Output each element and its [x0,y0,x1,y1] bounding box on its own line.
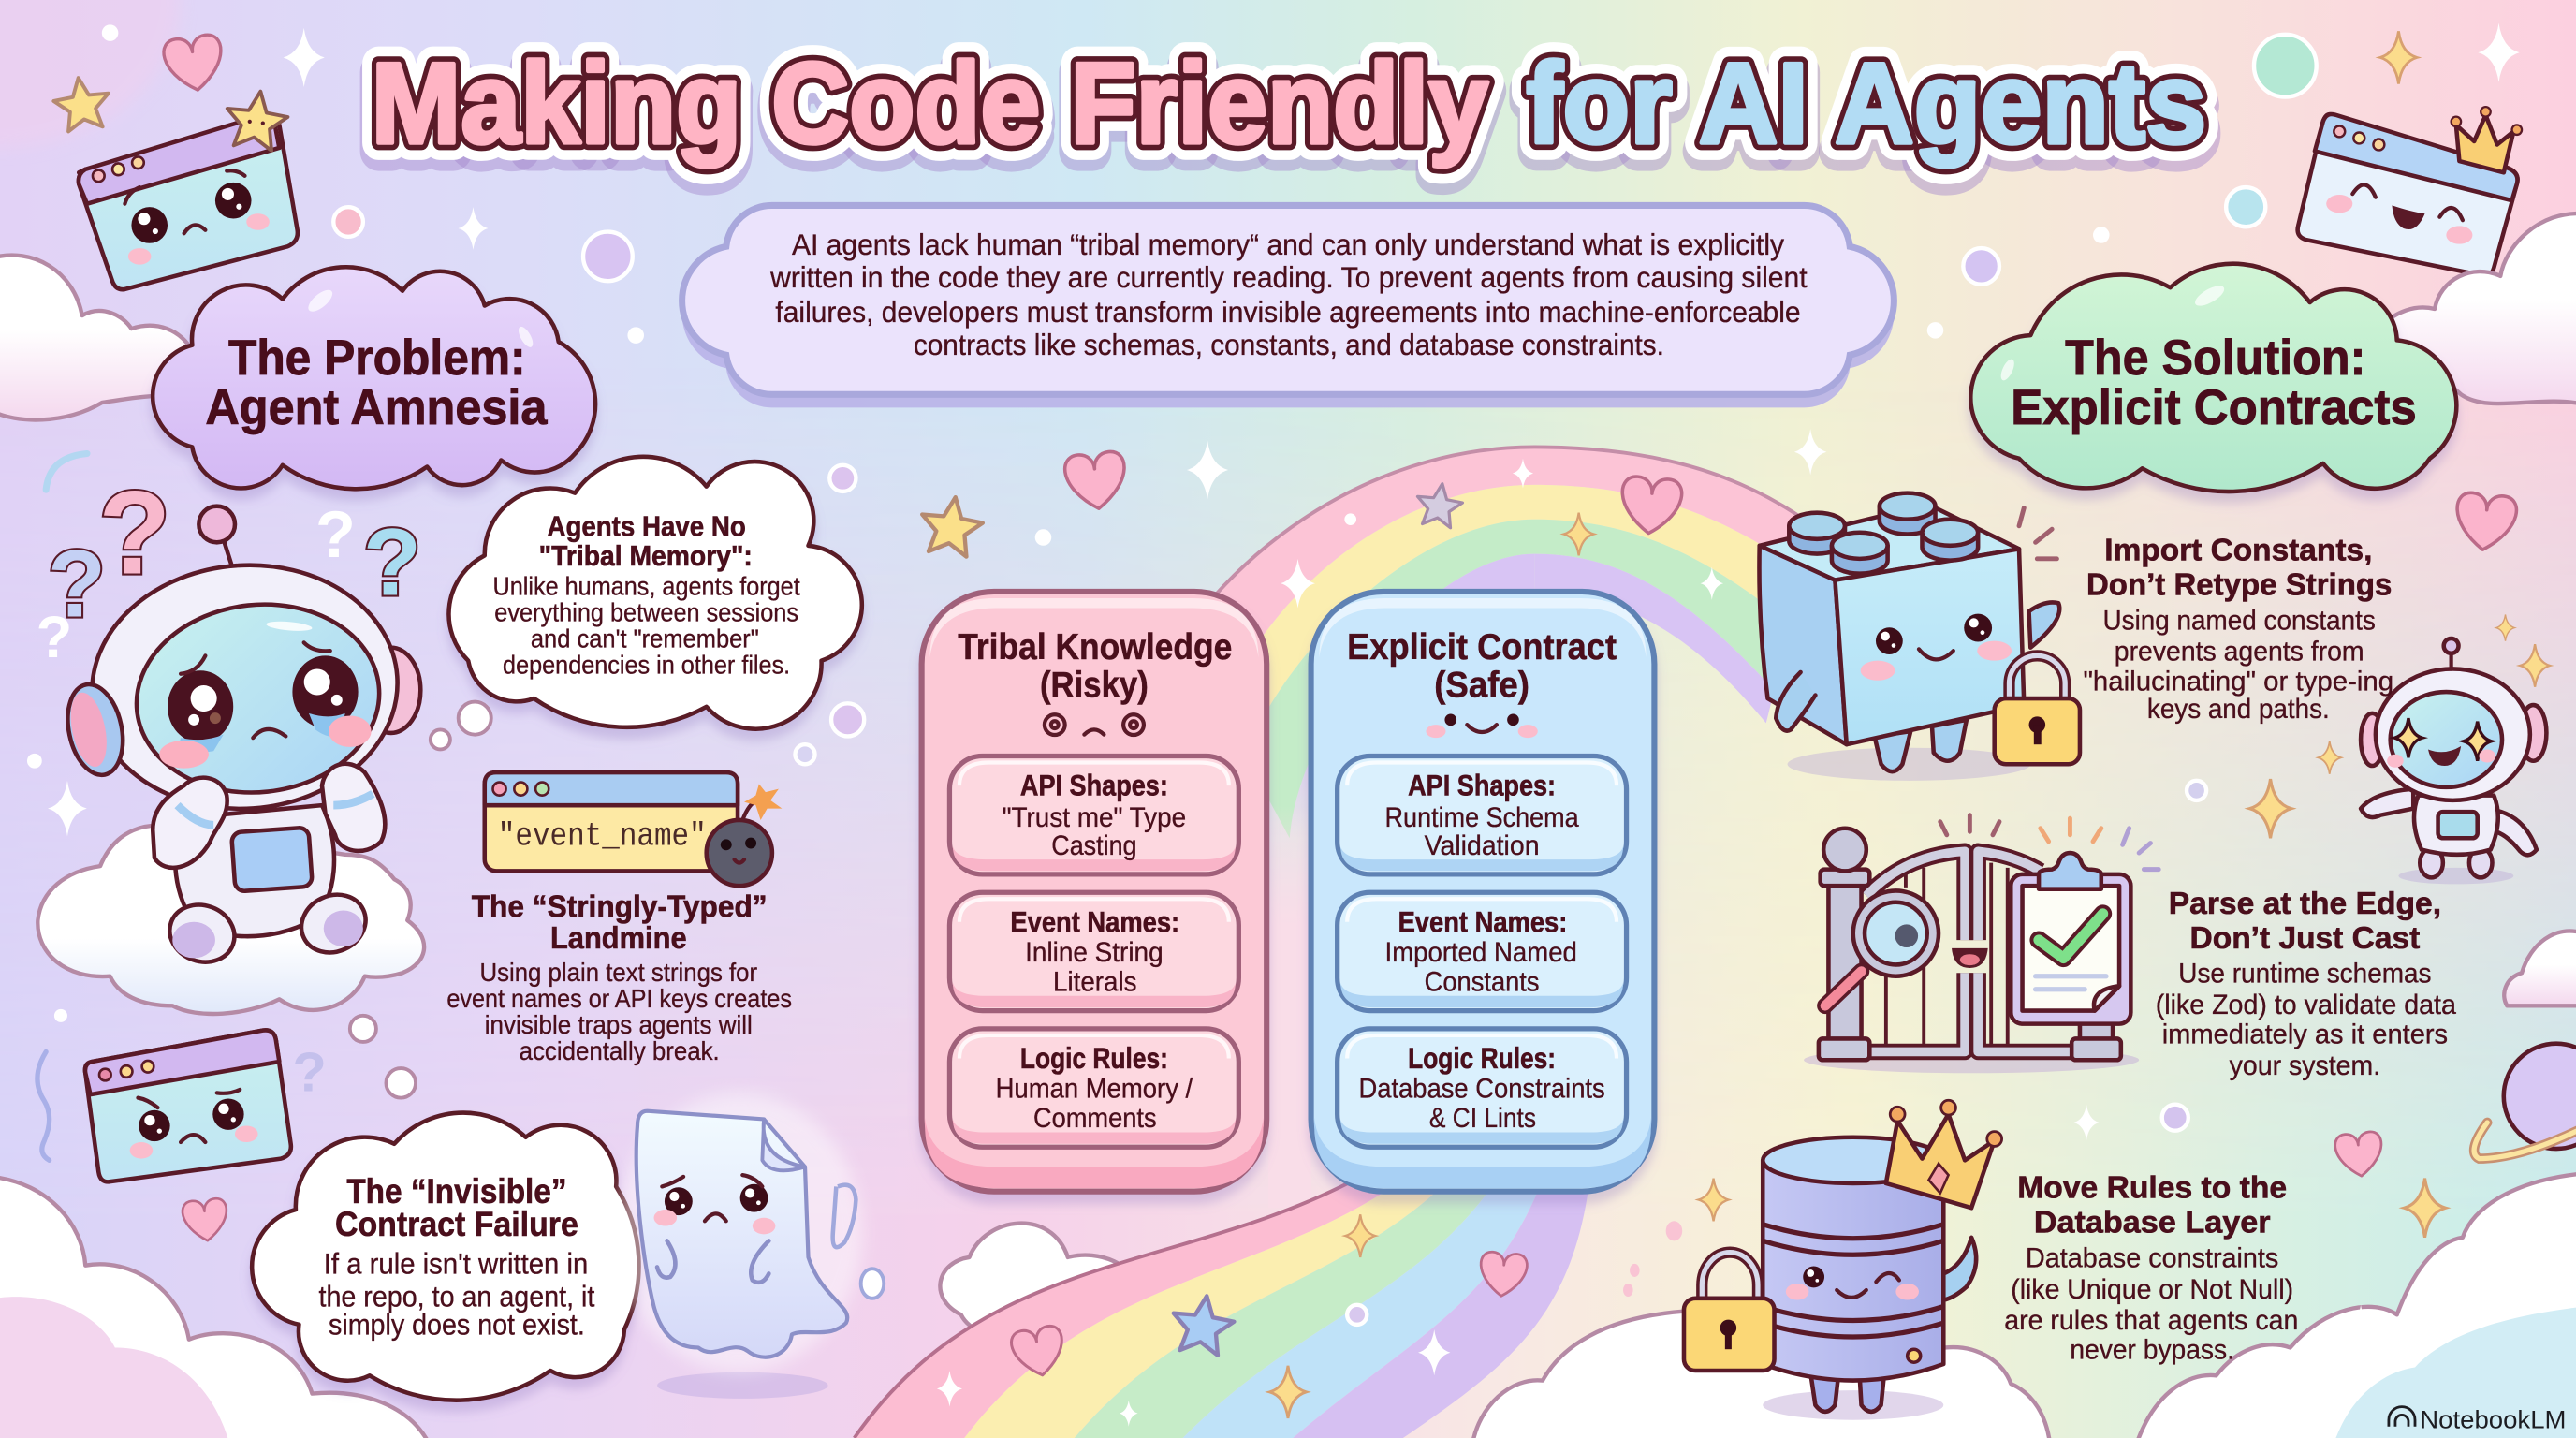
box: api shapes: API Shapes: [1020,769,1168,802]
front face [1835,549,2024,744]
box: event names [1338,892,1627,1011]
arms [2029,602,2059,648]
box: event names: Literals [1053,967,1137,998]
text: stringly-typed landmine: event names or API keys creates [446,984,792,1013]
rays [1940,815,1999,835]
box: event names: Constants [1425,967,1540,998]
box: logic rules: Human Memory / [996,1074,1193,1105]
astronaut: happy small [2361,638,2546,884]
callout: invisible contract failure: the repo, to an agent, it [318,1280,595,1313]
top face [1760,507,2019,580]
text: import constants: prevents agents from [2115,637,2364,668]
panel: explicit contract (safe): (Safe) [1434,665,1530,705]
bars [1886,863,2008,1049]
lock [1995,655,2080,764]
heading: the solution: The Solution: [2065,330,2365,386]
callout: invisible contract failure: The “Invisible” [346,1172,567,1211]
text: move rules: never bypass. [2070,1335,2234,1366]
text: move rules: Database Layer [2034,1206,2271,1240]
small rainbow [46,453,87,490]
ghost document [616,1093,884,1399]
title: for AI Agents [1526,40,2206,169]
question marks: ? [37,605,72,670]
gap between panels [1268,805,1311,1208]
thought cloud: agents have no tribal memory: everything between sessions [494,598,798,627]
text: move rules: (like Unique or Not Null) [2011,1274,2293,1305]
icon: bomb [707,784,782,886]
text: import constants: keys and paths. [2147,694,2330,725]
code window: event name [485,772,738,871]
text: move rules [2004,1171,2298,1366]
title: for AI Agents [1526,48,2206,177]
callout: invisible contract failure: simply does not exist. [329,1307,585,1341]
callout: invisible contract failure: Contract Failure [335,1205,578,1243]
box: event names: Inline String [1025,937,1164,968]
headphone right [361,648,420,733]
text: stringly-typed landmine: Using plain text strings for [479,958,757,987]
brand: notebooklm: NotebookLM [2420,1404,2566,1433]
cloud: top right [2382,213,2576,404]
icon: lego block [1759,493,2080,781]
icon: database with crown and lock [1684,1100,2002,1420]
panel: explicit contract (safe) [1311,592,1654,1192]
face: dizzy swirl [1045,714,1144,735]
helmet [84,555,405,819]
studs [1789,493,1978,574]
rainbow ribbon [855,1175,1590,1438]
intro panel: written in the code they are currently reading. To prevent agents from causing silent [769,260,1808,294]
box: logic rules: Logic Rules: [1408,1041,1556,1075]
thought cloud: agents have no tribal memory: Agents Have No [547,509,746,542]
body [175,805,334,936]
cloud: bottom left [0,1177,431,1438]
box: event names: Event Names: [1010,904,1179,938]
icon: gate with magnifier and clipboard [1804,815,2159,1073]
base right [2080,1019,2113,1040]
bubbles [333,35,2317,1325]
tears, blush, mouth, brows [159,642,372,769]
text: move rules: Database constraints [2026,1242,2278,1273]
text: parse at the edge [2156,887,2456,1081]
title: for AI Agents [1526,40,2206,169]
panel: tribal knowledge (risky): Tribal Knowledge [958,627,1232,668]
rainbow arch [1150,447,1823,838]
thought bubbles [350,702,491,1098]
panel: tribal knowledge (risky): (Risky) [1040,665,1149,705]
question marks: ? [315,497,356,571]
text: import constants: Using named constants [2103,605,2376,636]
text: parse at the edge: your system. [2230,1050,2380,1081]
heading: the problem [153,267,595,489]
gate leaves [1866,851,2073,1051]
title: Making Code Friendly [372,40,1488,169]
text: import constants: "hailucinating" or type-ing [2083,666,2393,697]
face: happy [1426,714,1538,738]
panel: explicit contract (safe): Explicit Contract [1347,627,1617,668]
box: logic rules: Comments [1033,1103,1157,1134]
intro panel: contracts like schemas, constants, and database constraints. [914,328,1664,361]
text: import constants: Don’t Retype Strings [2086,567,2392,602]
title: for AI Agents [1526,40,2206,169]
heading: the problem: Agent Amnesia [205,380,548,435]
sparkles: gold [1269,31,2550,1418]
cloud: small near rainbow [940,1224,1142,1340]
text: stringly-typed landmine: invisible traps agents will [485,1010,753,1039]
heading: the problem: The Problem: [228,330,526,386]
window: frustrated [37,1030,327,1181]
thought cloud: agents have no tribal memory: Unlike humans, agents forget [493,571,800,600]
thought cloud: agents have no tribal memory [448,457,862,729]
heading: the solution [1970,264,2456,492]
heading: the solution: Explicit Contracts [2011,380,2417,435]
arms [153,764,385,868]
eyes [168,655,359,742]
callout: invisible contract failure: If a rule isn't written in [324,1246,588,1280]
stars [51,74,1465,1357]
box: logic rules [949,1029,1238,1147]
cloud: bottom right [1472,1173,2576,1438]
text: import constants: Import Constants, [2104,534,2372,568]
intro panel: AI agents lack human “tribal memory“ and can only understand what is explicitly [792,227,1784,261]
headphone left [60,679,130,780]
text: import constants [2083,534,2393,725]
feet [1875,720,1967,771]
window: frustrated: ? [292,1041,327,1104]
box: logic rules: & CI Lints [1429,1103,1536,1134]
cloud under astronaut [37,826,424,1014]
gate mouth [1952,948,1988,968]
title [372,40,2206,177]
window: sad with star [79,87,298,289]
box: api shapes: "Trust me" Type [1003,802,1186,833]
code window: event name: "event_name" [498,817,707,855]
question marks: ? [363,508,421,615]
text: parse at the edge: immediately as it enters [2162,1020,2448,1050]
text: move rules: are rules that agents can [2004,1305,2298,1336]
thought cloud: agents have no tribal memory: dependencies in other files. [503,651,790,680]
text: parse at the edge: Parse at the Edge, [2169,887,2441,921]
box: logic rules: Database Constraints [1358,1074,1605,1105]
box: api shapes [1338,756,1627,874]
text: stringly-typed landmine: Landmine [550,921,687,956]
box: api shapes: API Shapes: [1408,769,1556,802]
question marks: ? [48,530,106,637]
question marks [37,467,421,670]
question marks: ? [98,467,170,599]
box: event names: Imported Named [1385,937,1577,968]
callout: invisible contract failure [252,1113,639,1401]
box: api shapes: Runtime Schema [1385,802,1579,833]
panel: tribal knowledge (risky) [922,592,1266,1192]
text: parse at the edge: Don’t Just Cast [2190,921,2420,956]
title: Making Code Friendly [372,40,1488,169]
text: parse at the edge: (like Zod) to validate data [2156,990,2456,1020]
box: event names: Event Names: [1398,904,1567,938]
box: api shapes [949,756,1238,874]
title: Making Code Friendly [372,40,1488,169]
intro panel [682,205,1894,407]
thought cloud: agents have no tribal memory: "Tribal Memory": [539,539,753,572]
text: stringly-typed landmine: The “Stringly-Typed” [472,890,768,925]
small dots pink [1623,1221,1682,1297]
icon: planet [2474,1044,2576,1159]
box: logic rules [1338,1029,1627,1147]
thought cloud: agents have no tribal memory: and can't "remember" [531,624,759,653]
face [1876,627,1903,654]
cloud: right small [2504,931,2576,1005]
box: api shapes: Validation [1425,830,1540,861]
box: api shapes: Casting [1051,830,1137,861]
text: stringly-typed landmine [446,890,792,1065]
left face [1759,546,1847,744]
text: move rules: Move Rules to the [2017,1171,2287,1206]
antenna [198,506,235,565]
clipboard [2011,853,2130,1024]
text: stringly-typed landmine: accidentally break. [520,1036,720,1065]
text: parse at the edge: Use runtime schemas [2178,959,2432,990]
box: event names [949,892,1238,1011]
cloud: top left [0,256,198,419]
magnifier [1825,890,1939,1005]
post left [1828,884,1862,1040]
legs [162,885,375,971]
box: logic rules: Logic Rules: [1020,1041,1168,1075]
intro panel: failures, developers must transform invisible agreements into machine-enforceable [775,295,1801,329]
rays [2019,507,2056,559]
astronaut: confused [37,506,424,1014]
title: Making Code Friendly [372,48,1488,177]
window: happy with crown [2298,107,2522,276]
